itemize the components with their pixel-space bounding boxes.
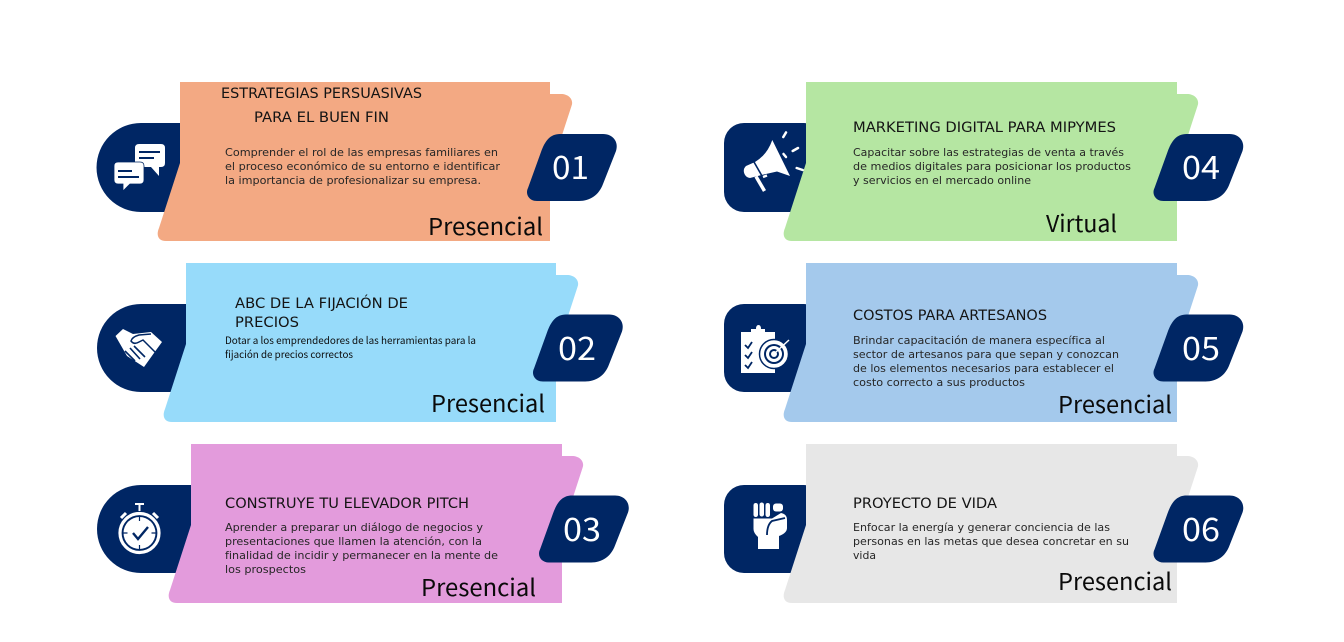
description 01: el proceso económico de su entorno e identificar xyxy=(225,160,501,173)
description 03: presentaciones que llamen la atención, con la xyxy=(225,535,482,548)
title 06: PROYECTO DE VIDA xyxy=(853,496,997,512)
icon: megaphone xyxy=(744,132,803,191)
number badge 03: 03 xyxy=(563,505,601,551)
description 01: Comprender el rol de las empresas familiares en xyxy=(225,146,498,159)
number badge 06 xyxy=(1154,496,1243,562)
description 01 xyxy=(225,146,501,187)
description 04: de medios digitales para posicionar los productos xyxy=(853,160,1131,173)
description 01: la importancia de profesionalizar su empresa. xyxy=(225,174,481,187)
panel: card 02 xyxy=(97,263,623,422)
number badge 01: 01 xyxy=(552,143,589,189)
number badge 04 xyxy=(1154,134,1243,201)
title 02: ABC DE LA FIJACIÓN DE xyxy=(235,294,408,312)
panel: card 03 xyxy=(97,444,629,603)
modality 01: Presencial xyxy=(428,208,543,242)
icon: stopwatch xyxy=(120,504,159,552)
number badge 03 xyxy=(539,496,629,562)
number badge 05 xyxy=(1154,314,1243,382)
description 06: vida xyxy=(853,549,876,562)
description 05: Brindar capacitación de manera específica al xyxy=(853,334,1105,347)
description 03 xyxy=(225,521,498,576)
icon: chat bubbles xyxy=(114,144,165,191)
icon: raised fist xyxy=(754,502,787,549)
title 05: COSTOS PARA ARTESANOS xyxy=(853,308,1047,324)
number badge 06: 06 xyxy=(1182,505,1220,551)
description 04: Capacitar sobre las estrategias de venta a través xyxy=(853,146,1124,159)
description 06: personas en las metas que desea concretar en su xyxy=(853,535,1129,548)
card background 06 xyxy=(784,444,1198,603)
panel: card 05 xyxy=(724,263,1243,422)
card background 05 xyxy=(784,263,1198,422)
description 03: Aprender a preparar un diálogo de negocios y xyxy=(225,521,484,534)
modality 05: Presencial xyxy=(1058,386,1172,420)
description 03: finalidad de incidir y permanecer en la mente de xyxy=(225,549,498,562)
card background 03 xyxy=(169,444,583,603)
description 06: Enfocar la energía y generar conciencia de las xyxy=(853,521,1110,534)
icon holder 01 xyxy=(97,123,200,212)
panel: card 06 xyxy=(724,444,1243,603)
modality 04: Virtual xyxy=(1046,205,1117,239)
title 01: PARA EL BUEN FIN xyxy=(254,110,389,126)
description 05: sector de artesanos para que sepan y conozcan xyxy=(853,348,1119,361)
number badge 02 xyxy=(533,314,623,382)
icon holder 03 xyxy=(97,485,211,573)
description 04 xyxy=(853,146,1131,187)
card background 02 xyxy=(164,263,578,422)
description 06 xyxy=(853,521,1129,562)
title 01 xyxy=(221,86,422,126)
description 05: costo correcto a sus productos xyxy=(853,376,1025,389)
icon holder 04 xyxy=(724,123,824,212)
icon holder 06 xyxy=(724,485,824,573)
title 02: PRECIOS xyxy=(235,315,299,331)
description 02: fijación de precios correctos xyxy=(225,346,353,361)
icon holder 02 xyxy=(97,304,206,392)
description 03: los prospectos xyxy=(225,563,306,576)
card background 04 xyxy=(784,82,1198,241)
modality 02: Presencial xyxy=(431,385,545,419)
description 04: y servicios en el mercado online xyxy=(853,174,1031,187)
panel: card 04 xyxy=(724,82,1243,241)
number badge 01 xyxy=(527,134,617,201)
title 03: CONSTRUYE TU ELEVADOR PITCH xyxy=(225,496,469,512)
title 02 xyxy=(235,294,408,331)
description 05: de los elementos necesarios para establecer el xyxy=(853,362,1114,375)
title 04: MARKETING DIGITAL PARA MIPYMES xyxy=(853,120,1116,136)
number badge 02: 02 xyxy=(558,324,596,370)
modality 06: Presencial xyxy=(1058,563,1172,597)
number badge 05: 05 xyxy=(1182,324,1220,370)
description 05 xyxy=(853,334,1119,389)
description 02 xyxy=(225,332,476,361)
number badge 04: 04 xyxy=(1182,143,1220,189)
card background 01 xyxy=(158,82,572,241)
icon holder 05 xyxy=(724,304,824,392)
description 02: Dotar a los emprendedores de las herramientas para la xyxy=(225,332,476,347)
icon: handshake xyxy=(116,329,162,367)
icon: clipboard with target xyxy=(741,325,789,373)
panel: card 01 xyxy=(97,82,617,242)
title 01: ESTRATEGIAS PERSUASIVAS xyxy=(221,86,422,102)
modality 03: Presencial xyxy=(421,569,536,603)
